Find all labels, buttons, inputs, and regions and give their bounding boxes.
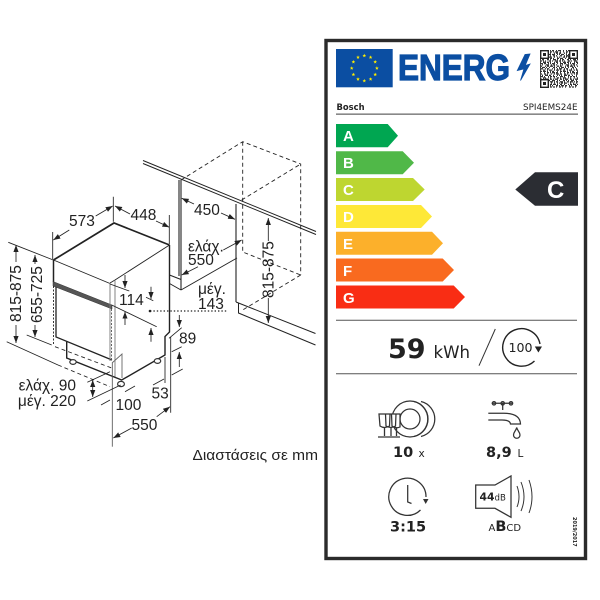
- dimension labels: 448: [130, 207, 156, 224]
- water value: L: [518, 448, 524, 460]
- bar G: [336, 286, 465, 308]
- dimension labels: [8, 202, 278, 434]
- dimension labels: 53: [152, 386, 169, 402]
- dimension labels: 89: [179, 330, 196, 348]
- icon: water tap: [488, 402, 520, 438]
- EU flag: [336, 49, 393, 87]
- noise class: ABCD: [488, 519, 521, 535]
- dimension labels: 815-875: [260, 241, 278, 298]
- dimension labels: 114: [119, 292, 144, 309]
- dimension labels: 100: [116, 397, 142, 414]
- dimension labels: 550: [132, 417, 158, 434]
- worktop and cabinet opening: [143, 142, 316, 345]
- rating arrow C: C: [547, 177, 564, 204]
- bar E: [336, 232, 443, 255]
- panel: energy label: [326, 40, 586, 558]
- bar D: [336, 205, 432, 228]
- energy scale: [336, 124, 465, 308]
- dimension lines: [7, 197, 242, 447]
- place settings value: 10: [393, 445, 413, 461]
- dotted centre line: [149, 310, 227, 312]
- energy consumption: [388, 329, 542, 366]
- dimension labels: 815-875: [8, 265, 25, 322]
- icon: 100 cycles: 100: [508, 340, 533, 355]
- bar C: [336, 178, 425, 201]
- dimension labels: 450: [194, 202, 220, 219]
- dimension labels: μέγ.: [198, 281, 226, 298]
- energy consumption: kWh: [434, 343, 470, 362]
- height arrow of cabinet: [267, 298, 269, 323]
- dimension labels: ελάχ. 90: [19, 378, 76, 394]
- bar E: E: [343, 236, 353, 253]
- dimension labels: ελάχ.: [188, 238, 224, 256]
- height arrow of cabinet upper: [267, 218, 269, 241]
- dimension labels: μέγ. 220: [18, 393, 76, 410]
- caption: dimensions in mm: Διαστάσεις σε mm: [192, 448, 318, 464]
- water value: 8,9: [486, 445, 512, 461]
- icon: place settings: [378, 401, 435, 437]
- supplier name: Bosch: [336, 102, 365, 112]
- place settings value: x: [418, 448, 425, 460]
- icon: 100 cycles: [503, 329, 542, 366]
- bar D: D: [343, 209, 354, 226]
- bar C: C: [343, 182, 354, 199]
- bar F: F: [343, 263, 352, 280]
- bar A: [336, 124, 398, 147]
- bar G: G: [343, 290, 355, 307]
- bar B: [336, 151, 414, 174]
- duration value: 3:15: [390, 520, 426, 536]
- appliance feet: [70, 359, 161, 387]
- regulation number: 2019/2017: [571, 517, 577, 547]
- panel: dimension drawing: [7, 142, 316, 447]
- appliance body: [53, 223, 170, 380]
- icon: clock: [389, 478, 428, 515]
- icon: speaker noise: [476, 476, 532, 517]
- dimension labels: 550: [188, 252, 214, 269]
- bar F: [336, 258, 454, 282]
- dimension labels: 655-725: [29, 266, 46, 323]
- icon: speaker noise: 44dB: [480, 490, 506, 504]
- bar A: A: [343, 128, 354, 145]
- ENERG wordmark: ENERG: [398, 47, 510, 88]
- icon: lightning bolt: [517, 54, 530, 80]
- dimension labels: 143: [198, 296, 224, 313]
- QR code: [540, 51, 578, 87]
- dimension labels: 573: [69, 213, 95, 230]
- rating arrow C: [515, 172, 578, 206]
- model number: SPI4EMS24E: [523, 102, 578, 112]
- place settings value: [393, 445, 425, 461]
- energy consumption: 59: [388, 334, 426, 365]
- water value: [486, 445, 524, 461]
- bar B: B: [343, 155, 354, 172]
- label frame: [326, 40, 586, 558]
